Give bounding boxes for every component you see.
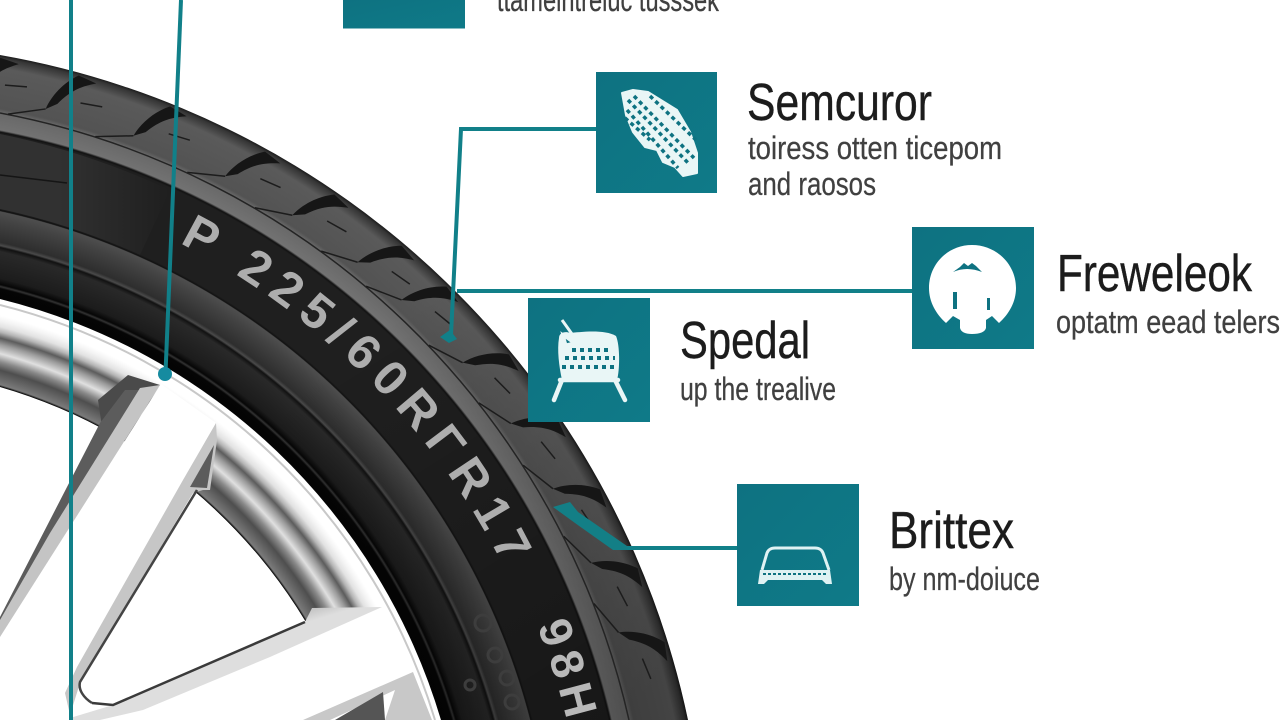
- heading: Spedal: [680, 312, 810, 370]
- callout: Freweleok: [912, 227, 1280, 349]
- anchor mark: [440, 330, 457, 343]
- arrow head: [553, 502, 627, 550]
- callout: Spedal: [528, 298, 836, 422]
- description: up the trealive: [680, 371, 836, 407]
- icon: stand: [528, 298, 650, 422]
- spoke edges: [0, 375, 432, 720]
- icon: dome: [912, 227, 1034, 349]
- icon: bench: [737, 484, 859, 606]
- description: toiress otten ticepom: [748, 130, 1002, 166]
- icon: tread sample: [596, 72, 717, 193]
- wheel rim: [0, 305, 435, 720]
- callout: Semcuror: [596, 72, 1002, 202]
- heading: Semcuror: [747, 74, 932, 132]
- anchor dot: [158, 367, 172, 381]
- sidewall small marks: [465, 615, 519, 709]
- heading: Brittex: [889, 502, 1014, 560]
- leader lines: [71, 0, 912, 720]
- tire: [0, 55, 688, 720]
- description: by nm-doiuce: [889, 561, 1040, 597]
- callout: Brittex: [737, 484, 1040, 606]
- tread grooves: [0, 48, 674, 688]
- icon: top box: [343, 0, 465, 28]
- description line 2: and raosos: [748, 166, 876, 202]
- sidewall size marking: P 225/60RΓR17: [182, 214, 532, 554]
